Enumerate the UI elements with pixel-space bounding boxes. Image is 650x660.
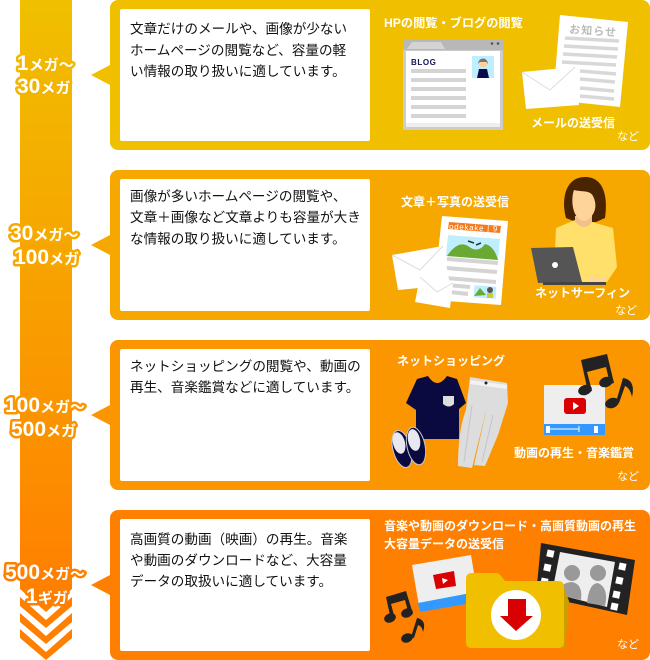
description text: や動画のダウンロードなど、大容量 (130, 552, 347, 568)
icon: film strip (536, 543, 635, 615)
caption: downloads (384, 518, 636, 551)
caption: email: メールの送受信 (531, 115, 615, 130)
description text: データの取扱いに適しています。 (130, 573, 332, 589)
icon: shoes (388, 426, 429, 470)
label: etc: など (617, 130, 639, 143)
speed label: 30 to 100 mega (10, 222, 79, 269)
icon: pants (458, 377, 508, 468)
speed label: 1 to 30 mega (17, 52, 74, 98)
caption: net shopping: ネットショッピング (397, 353, 505, 368)
speed label: 100 to 500 mega: 100メガ〜 (5, 394, 85, 417)
panel: 1 to 30 mega (91, 0, 650, 150)
speed label: 500 mega to 1 giga: 500メガ〜 (5, 561, 85, 584)
description text: 画像が多いホームページの閲覧や、 (130, 189, 346, 204)
description text: 文章＋画像など文章よりも容量が大き (130, 209, 361, 225)
speed label: 30 to 100 mega: 30メガ〜 (10, 222, 78, 245)
description text: ホームページの閲覧など、容量の軽 (130, 42, 347, 58)
speed label: 1 to 30 mega: 30メガ (17, 75, 70, 98)
icon: t-shirt (406, 376, 466, 439)
caption: text and photo: 文章＋写真の送受信 (401, 194, 509, 209)
icon: browser window: BLOG (411, 58, 437, 67)
icon: video player (544, 385, 605, 435)
speed label: 100 to 500 mega: 500メガ (11, 418, 76, 441)
description text: な情報の取り扱いに適しています。 (130, 232, 346, 246)
icon: newsletter paper (433, 216, 508, 305)
speed label: 100 to 500 mega (5, 394, 85, 441)
caption: HP and blog browsing: HPの閲覧・ブログの閲覧 (384, 15, 523, 30)
description text: い情報の取り扱いに適しています。 (130, 64, 346, 79)
icon: woman with laptop (531, 177, 617, 285)
description text: 高画質の動画（映画）の再生。音楽 (130, 531, 348, 547)
speed label: 500 mega to 1 giga (5, 561, 85, 608)
icon: tilted video player (412, 555, 478, 612)
label: etc: など (617, 638, 639, 651)
label: etc: など (617, 470, 639, 483)
description text: 再生、音楽鑑賞などに適しています。 (130, 379, 359, 395)
speed label: 30 to 100 mega: 100メガ (14, 246, 79, 269)
icon: notice paper: お知らせ (569, 22, 617, 39)
icon: download folder (466, 573, 569, 648)
caption: video and music: 動画の再生・音楽鑑賞 (514, 445, 634, 460)
description text (130, 531, 348, 589)
speed label: 1 to 30 mega: 1メガ〜 (17, 52, 74, 75)
panel: 100 to 500 mega (91, 340, 650, 490)
icon: notice paper (553, 15, 628, 107)
description text: ネットショッピングの閲覧や、動画の (130, 359, 361, 374)
label: etc: など (615, 304, 637, 317)
icon: envelope (522, 67, 579, 109)
icon: music notes (577, 354, 633, 410)
icon: browser window (403, 39, 503, 130)
description text: 文章だけのメールや、画像が少ない (130, 22, 347, 36)
panel: 30 to 100 mega (91, 170, 650, 320)
icon: newsletter paper: odekake | 9 (449, 222, 498, 234)
icon: envelopes (392, 246, 453, 308)
description text (130, 22, 347, 79)
speed label: 500 mega to 1 giga: 1ギガ (26, 585, 68, 608)
description text (130, 189, 361, 246)
icon: music notes (383, 591, 424, 644)
caption: downloads: 大容量データの送受信 (384, 536, 504, 551)
caption: downloads: 音楽や動画のダウンロード・高画質動画の再生 (384, 518, 636, 533)
caption: net surfing: ネットサーフィン (535, 286, 630, 300)
speed gradient bar (20, 0, 72, 660)
panel: 500 mega to 1 giga (91, 510, 650, 660)
description text (130, 359, 361, 395)
